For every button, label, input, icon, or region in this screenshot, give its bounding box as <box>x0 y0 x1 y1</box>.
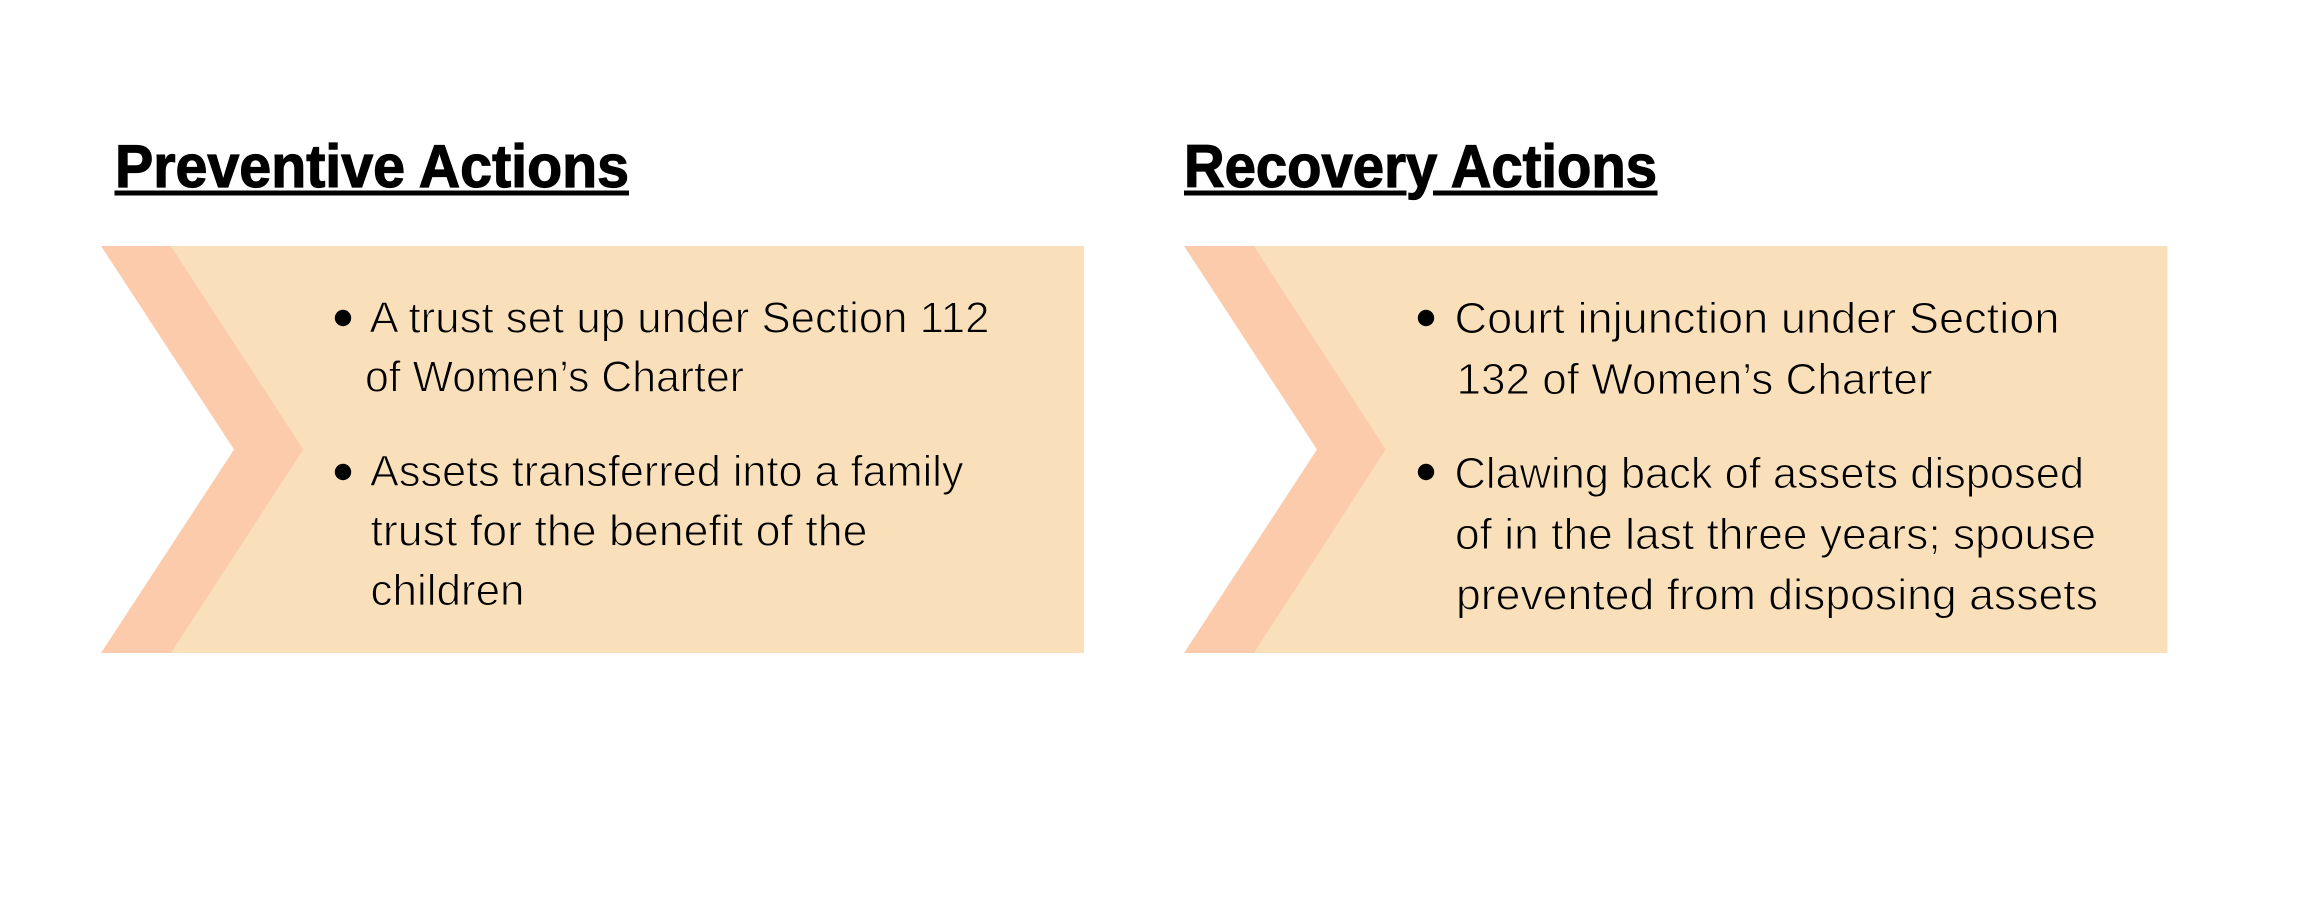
bullet item: family trust assets: Assets transferred into a family <box>370 447 964 496</box>
chevron band <box>1184 246 1386 653</box>
bullet item: court injunction: Court injunction under Section <box>1454 294 2060 343</box>
bullet list: preventive <box>335 294 990 615</box>
bullet item: trust under section 112: of Women’s Charter <box>365 352 744 402</box>
heading: recovery actions: Recovery Actions <box>1184 133 1657 200</box>
bullet item: trust under section 112 <box>335 294 990 402</box>
bullet item: family trust assets: children <box>370 566 524 615</box>
chevron band <box>101 246 304 653</box>
bullet item: court injunction: 132 of Women’s Charter <box>1456 355 1932 404</box>
panel: preventive actions <box>101 133 1084 653</box>
bullet item: clawing back assets <box>1418 449 2098 620</box>
bullet item: clawing back assets: prevented from disposing assets <box>1456 570 2098 620</box>
heading: preventive actions: Preventive Actions <box>115 133 629 200</box>
bullet item: clawing back assets: of in the last three years; spouse <box>1455 510 2096 559</box>
bullet item: court injunction <box>1418 294 2060 404</box>
bullet item: family trust assets: trust for the benefit of the <box>370 506 868 556</box>
arrow panel background <box>171 246 1084 653</box>
bullet item: clawing back assets: Clawing back of assets disposed <box>1454 449 2084 498</box>
bullet list: recovery <box>1418 294 2098 620</box>
bullet item: family trust assets <box>335 447 964 615</box>
bullet item: trust under section 112: A trust set up under Section 112 <box>370 294 990 342</box>
arrow panel background <box>1254 246 2168 653</box>
panel: recovery actions <box>1184 133 2168 653</box>
